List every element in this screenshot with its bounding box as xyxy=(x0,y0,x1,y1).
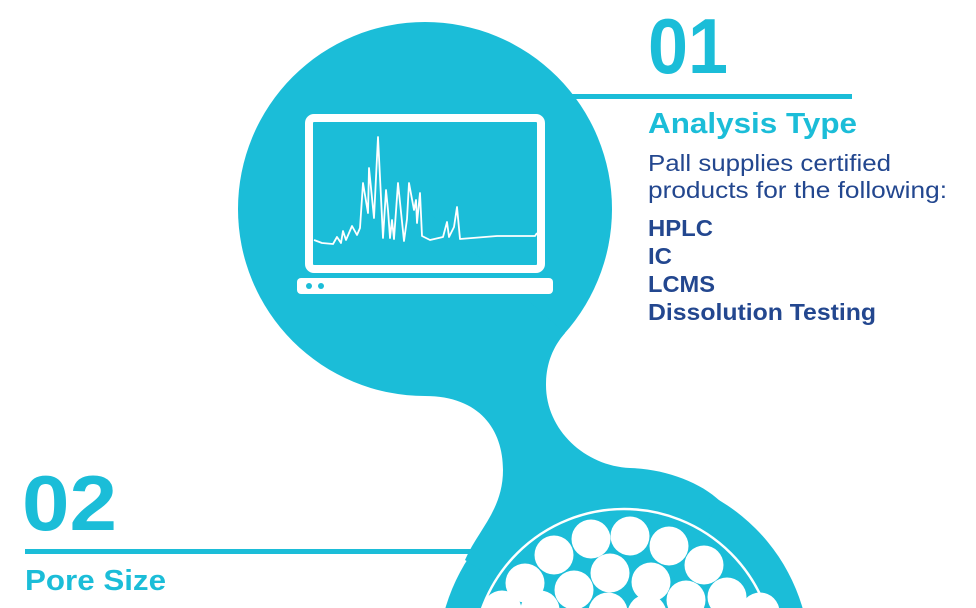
list: analysis types: LCMS xyxy=(648,271,715,297)
text block: description: products for the following: xyxy=(648,177,947,203)
text block: description xyxy=(648,150,947,203)
number 02: 02 xyxy=(22,459,117,547)
list: analysis types: HPLC xyxy=(648,215,713,241)
list: analysis types: Dissolution Testing xyxy=(648,299,876,325)
connector line 01 xyxy=(568,94,852,99)
teal blob shape xyxy=(238,22,810,608)
list: analysis types xyxy=(648,215,876,325)
heading: Pore Size: Pore Size xyxy=(25,565,166,597)
heading: Analysis Type: Analysis Type xyxy=(648,108,857,140)
list: analysis types: IC xyxy=(648,243,672,269)
number 01: 01 xyxy=(648,2,728,90)
icon: membrane pores xyxy=(473,509,780,608)
icon: laptop with chromatogram xyxy=(297,118,553,294)
connector line 02 xyxy=(25,549,475,554)
text block: description: Pall supplies certified xyxy=(648,150,891,176)
